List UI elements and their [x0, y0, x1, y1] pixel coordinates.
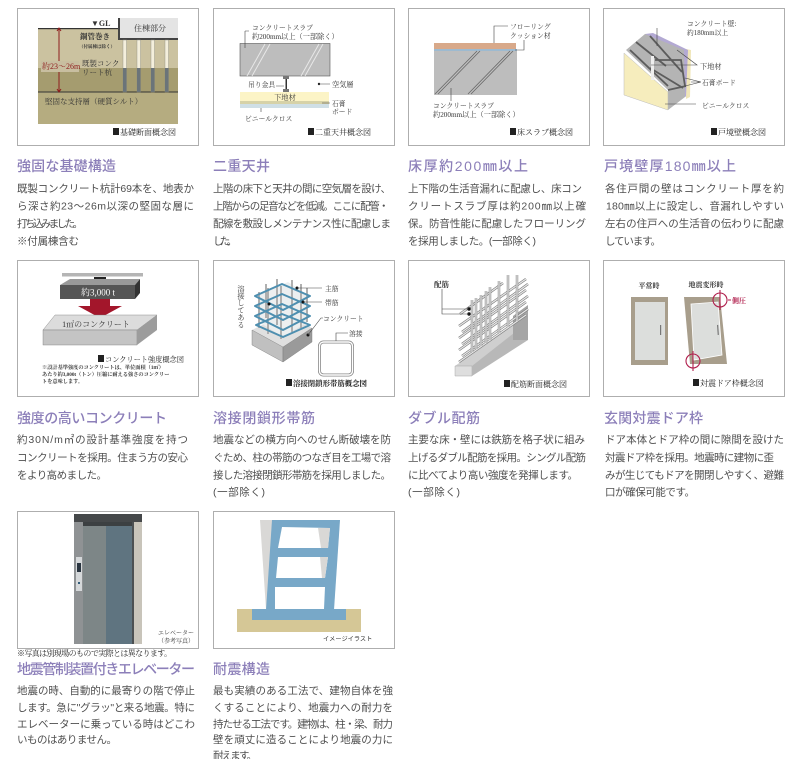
frame — [18, 260, 198, 396]
diagram: double ceiling — [240, 24, 371, 137]
diagram: door frame: 平常時 — [638, 281, 660, 290]
diagram: double ceiling: ビニールクロス — [245, 115, 292, 123]
heading: ダブル配筋 — [408, 410, 480, 426]
heading: 玄関対震ドア枠 — [604, 410, 703, 426]
diagram: foundation section: 約23～26m — [42, 61, 81, 71]
diagram: party wall: コンクリート壁: — [687, 19, 736, 28]
diagram: double reinforcement — [434, 275, 567, 389]
diagram: foundation section: 鋼管巻き — [80, 31, 110, 41]
panel: 耐震構造 — [213, 512, 394, 759]
diagram: foundation section — [38, 18, 178, 137]
diagram: floor slab: クッション材 — [510, 31, 551, 40]
body text: エレベーターに乗っている時はどこわ — [17, 718, 195, 730]
diagram: party wall: ビニールクロス — [702, 102, 749, 110]
frame — [214, 8, 394, 146]
body text: 上階の床下と天井の間に空気層を設け、 — [213, 182, 391, 195]
frame — [408, 260, 590, 396]
diagram: double ceiling: ボード — [332, 108, 352, 116]
diagram: welded hoop: 主筋 — [325, 284, 339, 293]
body text: 約30N/m㎡の設計基準強度を持つ — [17, 433, 188, 446]
body text: に比べてより高い強度を発揮します。 — [408, 468, 578, 482]
diagram: welded hoop: 溶接してある — [237, 284, 245, 328]
body text: くすることにより、地震力への耐力を — [213, 701, 393, 714]
diagram: party wall: 戸境壁概念図 — [718, 127, 766, 137]
frame — [18, 512, 198, 648]
diagram: welded hoop: コンクリート — [323, 315, 364, 323]
panel: 強固な基礎構造 — [17, 8, 198, 248]
diagram: floor slab: 約200mm以上（一部除く） — [433, 110, 520, 119]
body text: 持たせる工法です。建物は、柱・梁、耐力 — [213, 718, 393, 730]
diagram: double ceiling: 空気層 — [332, 80, 354, 89]
panel: 溶接閉鎖形帯筋 — [213, 260, 394, 498]
heading: 強固な基礎構造 — [17, 158, 116, 174]
diagram: double ceiling: 約200mm以上（一部除く） — [252, 32, 339, 41]
body text: 最も実績のある工法で、建物自体を強 — [213, 684, 394, 697]
body text: 上げるダブル配筋を採用。シングル配筋 — [408, 451, 586, 464]
illustration: seismic structure — [237, 520, 372, 643]
body text: 各住戸間の壁はコンクリート厚を約 — [605, 182, 784, 195]
diagram: double reinforcement: 配筋断面概念図 — [511, 379, 567, 389]
diagram: double ceiling: 石膏 — [332, 99, 346, 108]
body text: 地震の時、自動的に最寄りの階で停止 — [17, 684, 195, 697]
panel: 二重天井 — [213, 8, 394, 248]
photo: elevator — [74, 514, 142, 644]
body text: いものはありません。 — [17, 734, 117, 746]
heading: 戸境壁厚180㎜以上 — [604, 158, 736, 174]
diagram: concrete strength: 1㎡のコンクリート — [62, 320, 130, 329]
diagram: concrete strength: ※設計基準強度のコンクリートは、単位面積（1㎡） — [42, 363, 164, 371]
diagram: door frame: 地震変形時 — [688, 280, 724, 289]
diagram: welded hoop: 溶接閉鎖形帯筋概念図 — [293, 379, 368, 388]
diagram: door frame: 対震ドア枠概念図 — [700, 378, 764, 388]
body text: 口が確保可能です。 — [605, 486, 695, 498]
frame — [18, 8, 198, 146]
body text: を採用しました。(一部除く) — [408, 234, 536, 248]
heading: 溶接閉鎖形帯筋 — [213, 410, 315, 426]
body text — [17, 182, 194, 248]
body text: 地震などの横方向へのせん断破壊を防 — [213, 433, 391, 446]
body text: しています。 — [605, 236, 661, 248]
diagram: foundation section: 堅固な支持層（硬質シルト） — [45, 96, 142, 106]
body text: コンクリートを採用。住まう方の安心 — [17, 451, 188, 464]
caption: elevator: （参考写真） — [158, 637, 194, 645]
heading: 床厚約200㎜以上 — [408, 158, 528, 174]
body text: ぐため、柱の帯筋のつなぎ目を工場で溶 — [213, 451, 392, 464]
body text — [605, 182, 784, 248]
body text — [17, 684, 195, 746]
body text: (一部除く) — [408, 486, 460, 498]
diagram: party wall: 石膏ボード — [702, 78, 736, 87]
body text: します。急に"グラッ"と来る地震。特に — [17, 701, 195, 714]
body text: ら深さ約23～26m以深の堅固な層に — [17, 200, 194, 212]
heading: 地震管制装置付きエレベーター — [17, 661, 195, 677]
caption: elevator — [158, 629, 194, 645]
diagram: concrete strength: トを意味します。 — [42, 377, 83, 385]
body text — [17, 433, 188, 482]
illustration: seismic structure: イメージイラスト — [323, 636, 372, 643]
body text: 180㎜以上に設定し、音漏れしやすい — [606, 200, 784, 212]
panel: 地震管制装置付きエレベーター — [17, 512, 198, 746]
diagram: welded hoop: 溶接 — [349, 329, 363, 338]
panel: ダブル配筋 — [408, 260, 590, 498]
body text: 既製コンクリート杭計69本を、地表か — [17, 182, 194, 195]
panel: 玄関対震ドア枠 — [604, 260, 784, 498]
body text: 対震ドア枠を採用。地震時に建物に歪 — [605, 451, 774, 464]
body text: 打ち込みました。 — [17, 217, 83, 230]
diagram: floor slab: 床スラブ概念図 — [517, 127, 573, 137]
body text: 左右の住戸への生活音の伝わりに配慮 — [605, 217, 784, 230]
body text: 上階からの足音などを低減。ここに配管・ — [213, 200, 389, 212]
diagram: welded hoop: 帯筋 — [325, 298, 339, 307]
frame — [604, 260, 784, 396]
diagram: floor slab — [433, 23, 573, 137]
diagram: foundation section: リート杭 — [82, 67, 112, 77]
body text: (一部除く) — [213, 486, 265, 498]
diagram: foundation section: ▼GL — [91, 19, 110, 28]
diagram: party wall — [624, 19, 766, 137]
body text: した。 — [213, 236, 237, 248]
body text: 保。防音性能に配慮したフローリング — [408, 217, 586, 230]
body text: みが生じてもドアを開閉しやすく、避難 — [605, 468, 784, 482]
panel: 強度の高いコンクリート — [17, 260, 198, 482]
body text: 上下階の生活音漏れに配慮し、床コン — [408, 182, 582, 195]
heading: 二重天井 — [213, 158, 270, 174]
diagram: party wall: 約180mm以上 — [687, 28, 728, 37]
diagram: concrete strength: コンクリート強度概念図 — [105, 355, 184, 364]
body text — [213, 433, 392, 498]
body text — [213, 182, 391, 248]
diagram: floor slab: フローリング — [510, 23, 551, 31]
body text — [213, 684, 394, 759]
body text — [408, 433, 586, 498]
frame — [214, 260, 394, 396]
diagram: double ceiling: 二重天井概念図 — [315, 127, 371, 137]
diagram: double reinforcement: 配筋 — [434, 279, 449, 289]
diagram: concrete strength: あたり約3,000t（トン）圧縮に耐える強さのコンクリー — [42, 370, 169, 378]
body text: ※付属棟含む — [17, 234, 79, 248]
diagram: concrete strength — [42, 273, 184, 385]
diagram: double ceiling: コンクリートスラブ — [252, 24, 313, 32]
body text: 接した溶接閉鎖形帯筋を採用しました。 — [213, 468, 391, 482]
caption: elevator: エレベーター — [158, 629, 194, 637]
panel: 戸境壁厚180㎜以上 — [604, 8, 784, 248]
diagram: foundation section: 基礎断面概念図 — [120, 127, 176, 137]
diagram: door frame: 側圧 — [732, 296, 746, 305]
diagram: concrete strength: 約3,000 t — [81, 286, 115, 298]
diagram: floor slab: コンクリートスラブ — [433, 102, 494, 110]
diagram: welded hoop — [237, 279, 368, 388]
diagram: double ceiling: 下地材 — [274, 93, 296, 102]
frame — [604, 8, 784, 146]
diagram: foundation section: 住棟部分 — [134, 23, 166, 33]
frame — [408, 8, 590, 146]
heading: 強度の高いコンクリート — [17, 410, 167, 426]
body text: 配線を敷設しメンテナンス性に配慮しま — [213, 217, 391, 230]
photo note: ※写真は別現場のもので実際とは異なります。 — [17, 648, 172, 658]
body text: をより高めました。 — [17, 468, 107, 482]
frame — [214, 512, 394, 648]
diagram: foundation section: （付属棟は除く） — [79, 43, 115, 50]
heading: 耐震構造 — [213, 661, 270, 677]
body text: クリートスラブ厚は約200㎜以上確 — [408, 200, 586, 212]
body text: 壁を頑丈に造ることにより地震の力に — [213, 733, 393, 746]
body text — [605, 433, 784, 498]
body text: 主要な床・壁には鉄筋を格子状に組み — [408, 433, 585, 446]
diagram: door frame — [631, 280, 764, 388]
panel: 床厚約200㎜以上 — [408, 8, 590, 248]
diagram: double ceiling: 吊り金具 — [248, 80, 276, 89]
diagram: foundation section: 既製コンク — [82, 58, 119, 68]
body text — [408, 182, 586, 248]
diagram: party wall: 下地材 — [700, 62, 722, 71]
body text: ドア本体とドア枠の間に隙間を設けた — [605, 433, 784, 446]
